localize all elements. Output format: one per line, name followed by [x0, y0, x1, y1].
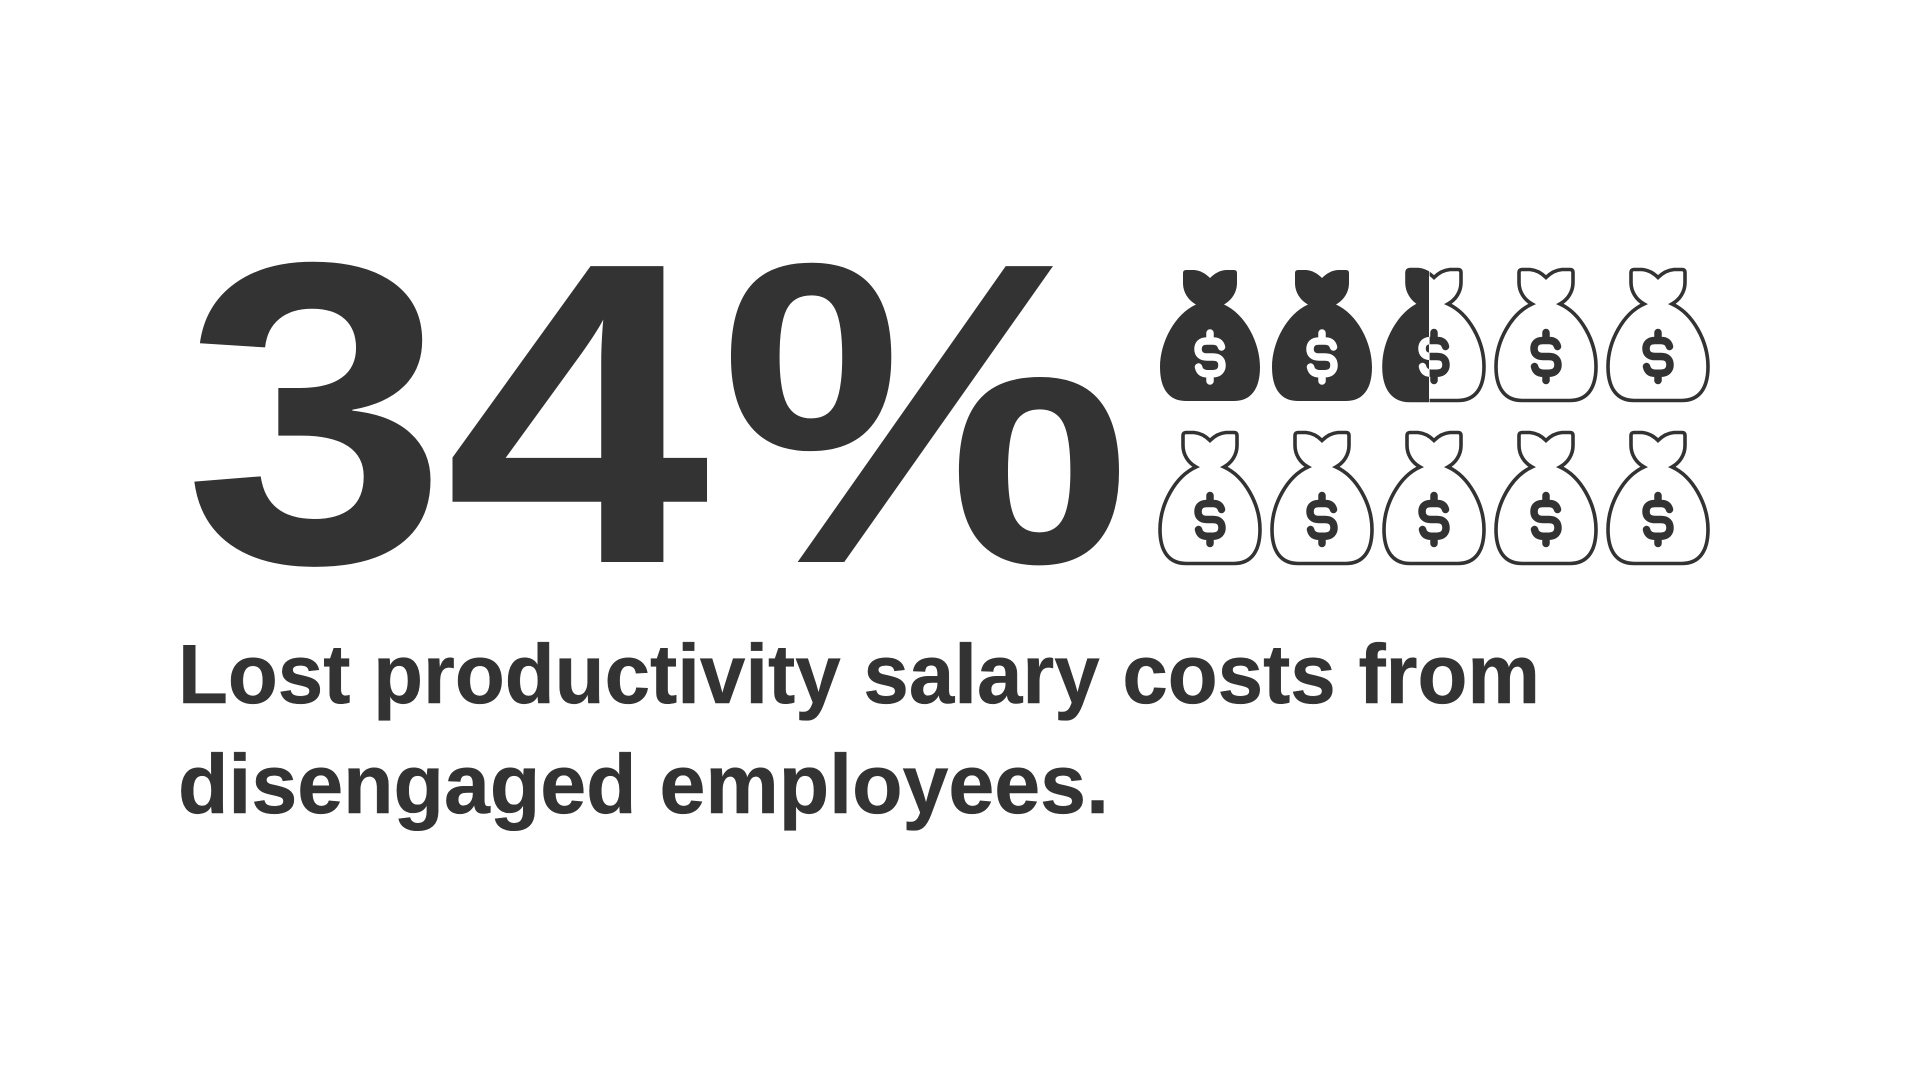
infographic canvas — [181, 262, 1710, 831]
icon: filled money bag 2 — [1272, 270, 1372, 401]
big number: 34%: % — [719, 174, 1131, 654]
icon grid: money bags — [1160, 270, 1708, 564]
icon: outlined money bag 7 — [1272, 432, 1372, 564]
description text: disengaged employees. — [178, 737, 1109, 831]
description text: Lost productivity salary costs from — [178, 627, 1540, 721]
icon: outlined money bag 4 — [1496, 270, 1596, 400]
icon: filled money bag 1 — [1160, 270, 1260, 401]
icon: outlined money bag 6 — [1160, 432, 1260, 564]
icon: outlined money bag 8 — [1384, 432, 1484, 564]
icon: outlined money bag 5 — [1608, 270, 1708, 400]
icon: outlined money bag 9 — [1496, 432, 1596, 564]
description text — [178, 627, 1540, 831]
icon: partly filled money bag 3 — [1384, 270, 1484, 400]
big number: 34% — [183, 174, 1131, 654]
icon: outlined money bag 10 — [1608, 432, 1708, 564]
big number: 34%: 34 — [183, 174, 713, 654]
